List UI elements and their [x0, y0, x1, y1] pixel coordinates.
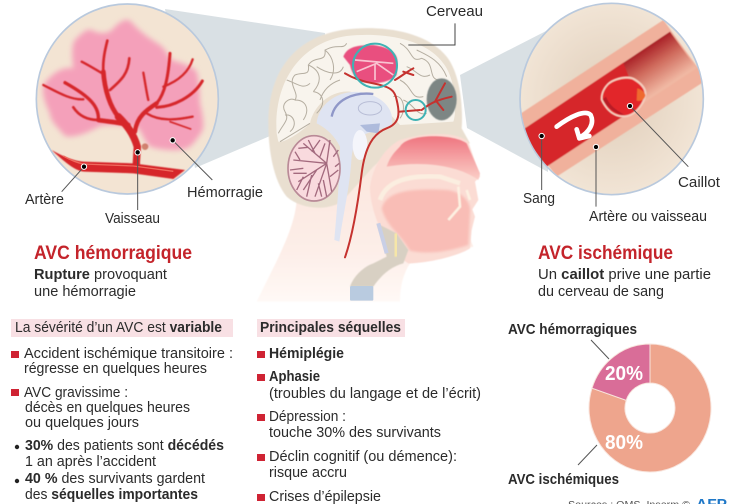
panel: main after-effects: risque accru: [269, 464, 347, 481]
heading: haemorrhagic stroke: une hémorragie: [34, 283, 136, 300]
panel: severity: décès en quelques heures: [25, 399, 190, 416]
heading: ischaemic stroke: du cerveau de sang: [538, 283, 664, 300]
panel: severity: des séquelles importantes: [25, 486, 198, 503]
donut chart: stroke types: 80%: [605, 432, 643, 454]
panel: main after-effects: (troubles du langage et de l’écrit): [269, 385, 481, 402]
labels around illustrations: [25, 3, 721, 227]
skull: [268, 28, 470, 208]
labels around illustrations: Artère: [25, 191, 64, 208]
left zoom beam: [165, 9, 330, 168]
slice: ischaemic 80%: [589, 344, 711, 472]
donut chart: stroke types: [508, 321, 711, 488]
panel: main after-effects: Aphasie: [269, 368, 320, 385]
slice: haemorrhagic 20%: [592, 344, 650, 400]
nasal cavity: [387, 136, 480, 180]
teal highlight circles: [353, 44, 397, 88]
panel: severity: [11, 319, 233, 503]
head cross-section illustration: [257, 23, 480, 302]
panel: main after-effects: Principales séquelles: [260, 319, 401, 336]
heading: ischaemic stroke: AVC ischémique: [538, 243, 673, 264]
panel: main after-effects: Dépression :: [269, 408, 346, 425]
inner brain structures: [317, 92, 392, 242]
cerebellum: [288, 136, 340, 201]
ischaemic grey area: [427, 78, 457, 120]
neck and skin: [257, 133, 473, 302]
artery and vessel tree: [43, 41, 202, 168]
source credit: [568, 496, 727, 504]
panel: severity: AVC gravissime :: [24, 384, 128, 401]
heading: ischaemic stroke: [538, 243, 711, 300]
labels around illustrations: Caillot: [678, 174, 721, 191]
brain folds: [278, 43, 452, 142]
clot: [601, 76, 647, 117]
haemorrhage spot: [343, 45, 397, 83]
panel: severity: régresse en quelques heures: [24, 360, 207, 377]
right zoom beam: [460, 30, 548, 172]
panel: severity: La sévérité d’un AVC est variable: [15, 319, 222, 336]
panel: severity: 1 an après l’accident: [25, 453, 157, 470]
flow arrow: [557, 113, 592, 138]
mouth cavity: [382, 189, 470, 253]
labels around illustrations: Artère ou vaisseau: [589, 208, 707, 225]
heading: haemorrhagic stroke: [34, 243, 192, 300]
haemorrhage pink area: [43, 20, 203, 150]
labels around illustrations: Vaisseau: [105, 210, 160, 227]
panel: severity: 30% des patients sont décédés: [25, 437, 224, 454]
panel: severity: ou quelques jours: [25, 414, 139, 431]
panel: severity: 40 % des survivants gardent: [25, 470, 206, 487]
cerebrum: [276, 35, 455, 142]
panel: main after-effects: touche 30% des survivants: [269, 424, 441, 441]
donut chart: stroke types: AVC ischémiques: [508, 471, 619, 488]
labels around illustrations: Sang: [523, 190, 555, 207]
labels around illustrations: Cerveau: [426, 3, 483, 20]
labels around illustrations: Hémorragie: [187, 184, 263, 201]
panel: main after-effects: Déclin cognitif (ou démence):: [269, 448, 457, 465]
callout lines and dots: [62, 140, 212, 210]
panel: main after-effects: Hémiplégie: [269, 345, 344, 362]
artery with clot: [513, 20, 707, 177]
donut chart: stroke types: AVC hémorragiques: [508, 321, 637, 338]
panel: main after-effects: [257, 319, 481, 504]
panel: haemorrhage magnified circle: [36, 4, 218, 210]
heading: haemorrhagic stroke: AVC hémorragique: [34, 243, 192, 264]
panel: ischaemic magnified circle: [513, 3, 707, 207]
donut chart: stroke types: 20%: [605, 363, 643, 385]
panel: severity: Accident ischémique transitoire :: [24, 345, 233, 362]
heading: haemorrhagic stroke: Rupture provoquant: [34, 266, 168, 283]
throat and trachea: [350, 223, 408, 287]
brain callout line: [408, 23, 455, 45]
heading: ischaemic stroke: Un caillot prive une partie: [538, 266, 711, 283]
callout lines and dots: [542, 106, 688, 207]
brain artery: [345, 68, 452, 257]
face: [370, 134, 480, 263]
